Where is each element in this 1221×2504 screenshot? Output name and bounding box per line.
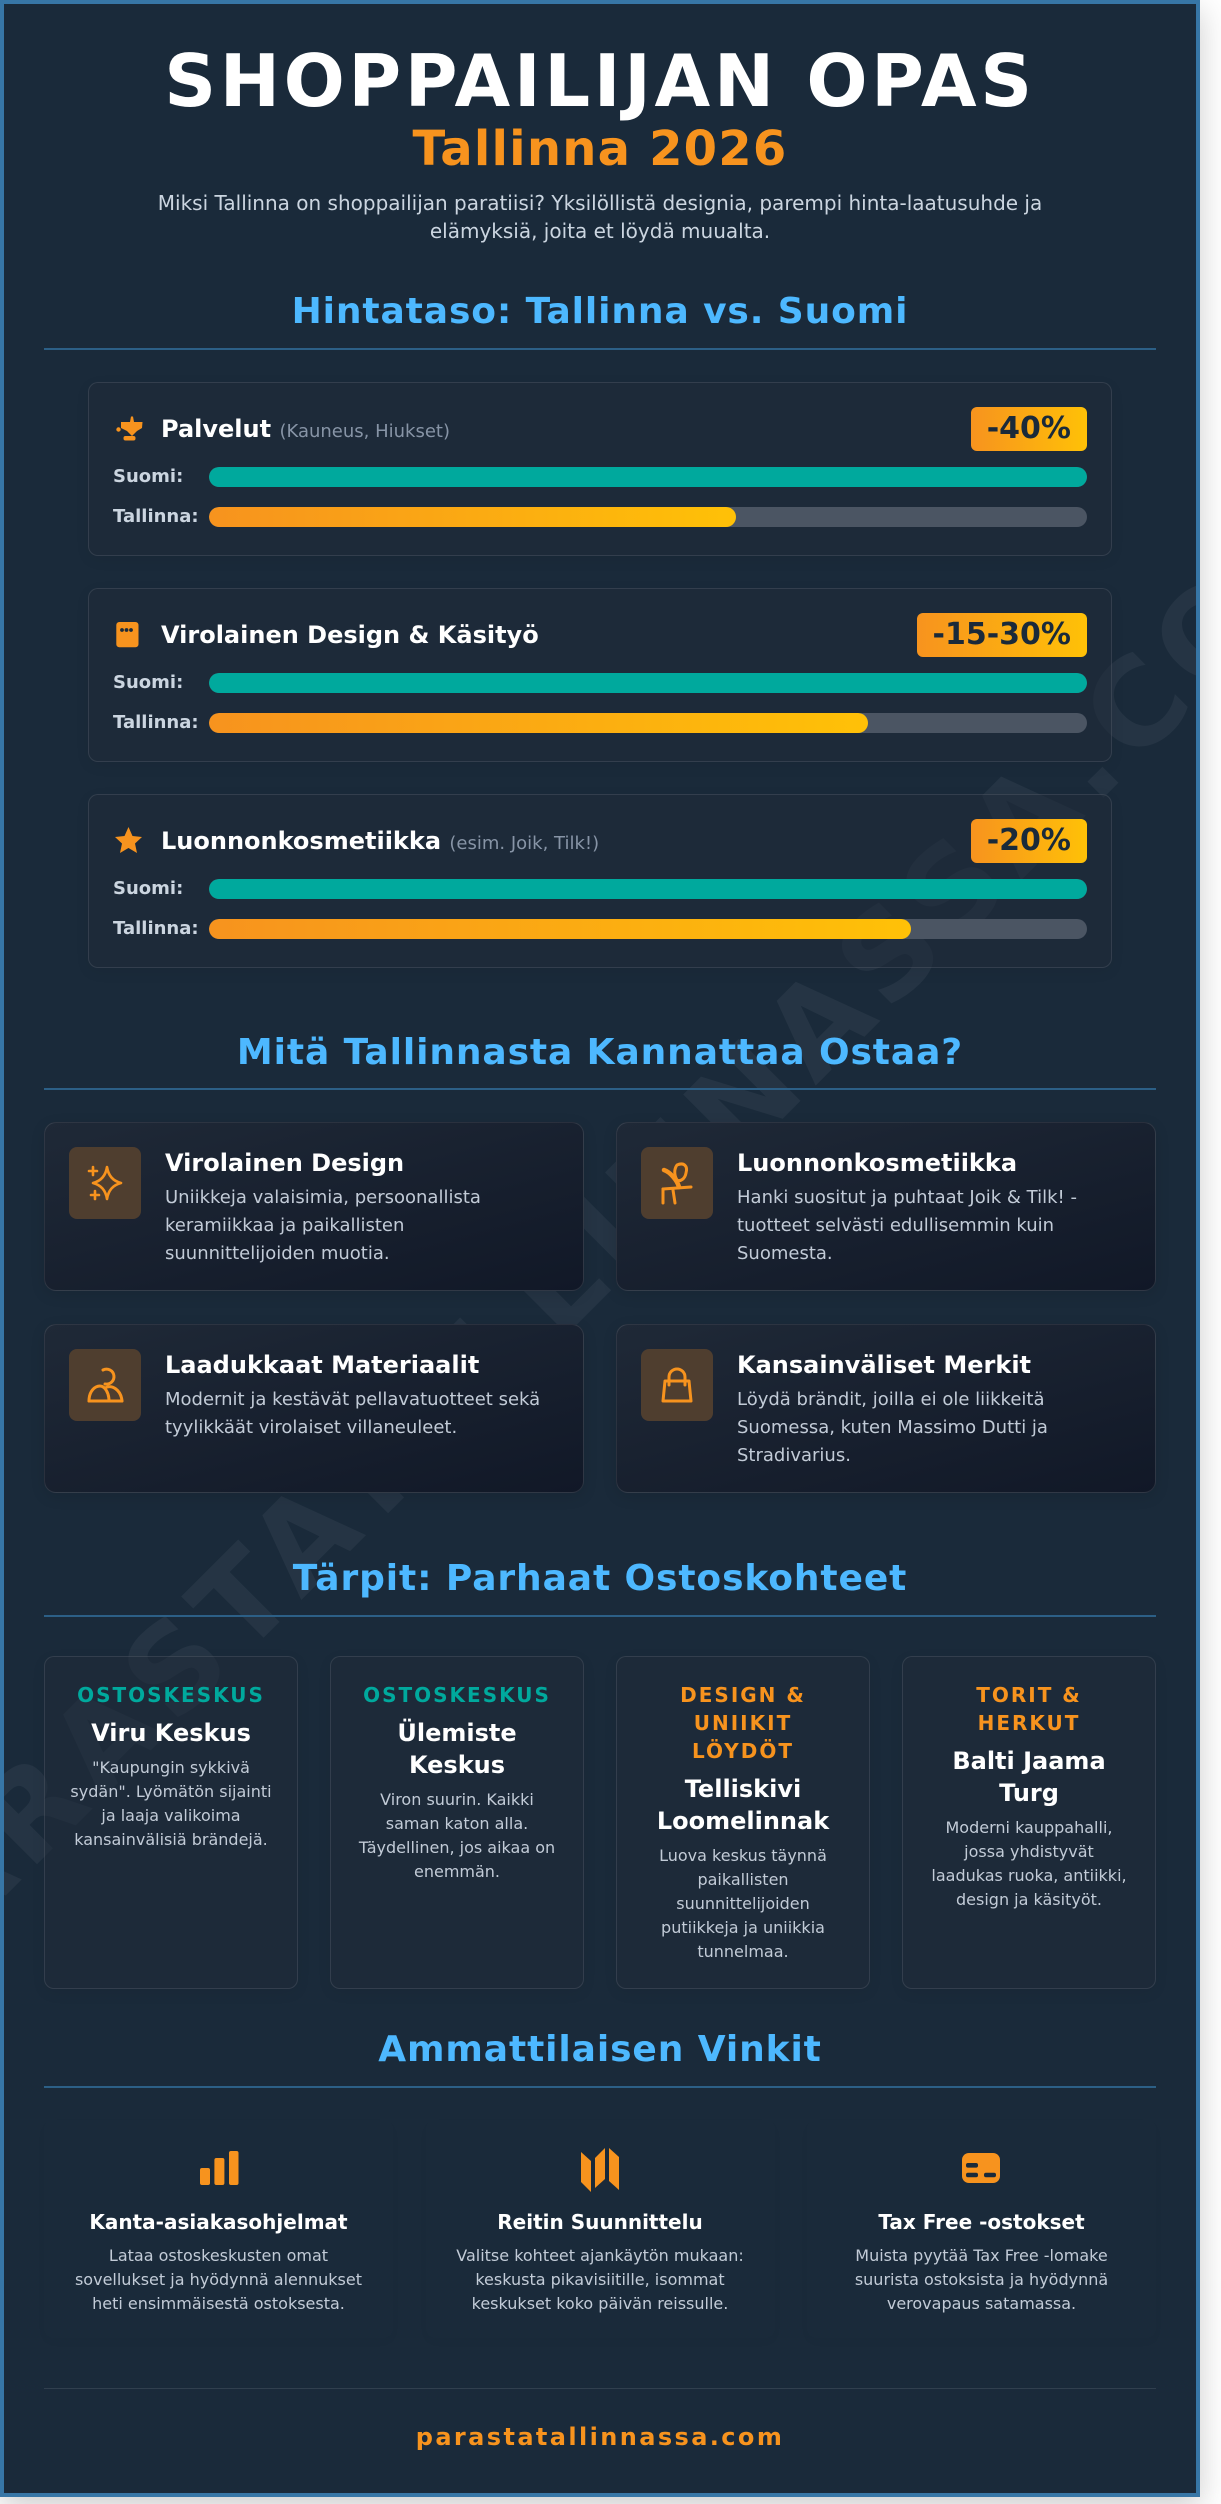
services bar Suomi (209, 467, 1087, 487)
feature design text (165, 1187, 481, 1264)
cosmetics label Tallinna: Tallinna: (113, 918, 199, 939)
heading: top destinations: Tärpit: Parhaat Ostoskohteet (293, 1558, 907, 1599)
cosmetics label Suomi: Suomi: (113, 878, 183, 899)
icon: star (115, 827, 142, 853)
cosmetics bar Tallinna (209, 919, 1087, 939)
panel: Telliskivi Loomelinnak: Luova keskus täynnä (659, 1846, 827, 1865)
services heading: Palvelut (Kauneus, Hiukset) (161, 415, 450, 443)
panel: route tip: keskukset koko päivän reissulle. (472, 2294, 728, 2312)
icon: leaf (662, 1162, 692, 1204)
design bar Suomi (209, 673, 1087, 693)
icon box: bag (641, 1349, 713, 1421)
panel: Viru Keskus: ja laaja valikoima (101, 1806, 241, 1825)
feature cosmetics text (737, 1187, 1077, 1264)
feature brands text (737, 1389, 1048, 1466)
tip title route: Reitin Suunnittelu (497, 2210, 703, 2234)
panel: Telliskivi Loomelinnak: UNIIKIT (694, 1711, 792, 1735)
services label Tallinna: Tallinna: (113, 506, 199, 527)
panel: tax free tip: Muista pyytää Tax Free -lomake (855, 2246, 1108, 2264)
panel: Viru Keskus: kansainvälisiä brändejä. (74, 1830, 268, 1849)
icon box: leaf (641, 1147, 713, 1219)
subtitle: Tallinna 2026 (413, 121, 787, 177)
panel: feature materials (44, 1324, 584, 1493)
design badge (917, 613, 1087, 657)
panel: Balti Jaama Turg: Turg (999, 1778, 1059, 1806)
feature cosmetics text: Suomesta. (737, 1243, 833, 1264)
services badge: -40% (987, 411, 1071, 446)
design label Tallinna: Tallinna: (113, 712, 199, 733)
panel: Telliskivi Loomelinnak: Telliskivi (685, 1774, 801, 1802)
panel: Telliskivi Loomelinnak: suunnittelijoiden (676, 1894, 810, 1913)
services badge (971, 407, 1087, 451)
panel: Viru Keskus: Viru Keskus (91, 1718, 251, 1746)
panel: Balti Jaama Turg: Balti Jaama (952, 1746, 1106, 1774)
panel: route tip: keskusta pikavisiitille, isommat (475, 2270, 725, 2288)
feature materials title: Laadukkaat Materiaalit (165, 1351, 479, 1379)
panel: Telliskivi Loomelinnak: putiikkeja ja uniikkia (661, 1918, 825, 1937)
feature brands text: Stradivarius. (737, 1445, 851, 1466)
panel: feature brands (616, 1324, 1156, 1493)
design bar Tallinna (209, 713, 1087, 733)
panel: tax free tip: verovapaus satamassa. (887, 2294, 1076, 2312)
icon: hanger (88, 1368, 124, 1402)
panel: loyalty tip: Lataa ostoskeskusten omat (109, 2246, 328, 2264)
panel: services price card (88, 382, 1112, 556)
panel: Viru Keskus: sydän". Lyömätön sijainti (70, 1782, 272, 1801)
panel: tax free tip: suurista ostoksista ja hyödynnä (855, 2270, 1108, 2288)
tip title tax free: Tax Free -ostokset (878, 2210, 1085, 2234)
services label Suomi: Suomi: (113, 466, 183, 487)
icon: sparkles (88, 1166, 122, 1200)
panel: Telliskivi Loomelinnak: Loomelinnak (657, 1806, 829, 1834)
panel: Viru Keskus (44, 1656, 298, 1989)
cosmetics badge (971, 819, 1087, 863)
cosmetics heading: Luonnonkosmetiikka (esim. Joik, Tilk!) (161, 827, 599, 855)
icon box: hanger (69, 1349, 141, 1421)
feature cosmetics text: tuotteet selvästi edullisemmin kuin (737, 1215, 1054, 1236)
panel: feature cosmetics (616, 1122, 1156, 1291)
panel: Viru Keskus: OSTOSKESKUS (77, 1683, 265, 1707)
services bar Tallinna (209, 507, 1087, 527)
heading: price level: Hintataso: Tallinna vs. Suomi (292, 291, 908, 332)
feature brands text: Löydä brändit, joilla ei ole liikkeitä (737, 1389, 1044, 1410)
panel: cosmetics price card (88, 794, 1112, 968)
panel: design price card (88, 588, 1112, 762)
tip title loyalty: Kanta-asiakasohjelmat (89, 2210, 348, 2234)
feature brands text: Suomessa, kuten Massimo Dutti ja (737, 1417, 1048, 1438)
heading: pro tips: Ammattilaisen Vinkit (378, 2029, 822, 2070)
panel: Ülemiste Keskus: saman katon alla. (386, 1814, 528, 1833)
panel: feature design (44, 1122, 584, 1291)
design badge: -15-30% (933, 617, 1071, 652)
feature brands title: Kansainväliset Merkit (737, 1351, 1031, 1379)
panel: Balti Jaama Turg: design ja käsityöt. (956, 1890, 1102, 1909)
panel: route tip: Valitse kohteet ajankäytön mukaan: (456, 2246, 744, 2264)
panel: Balti Jaama Turg: HERKUT (978, 1711, 1080, 1735)
panel: Ülemiste Keskus (330, 1656, 584, 1989)
panel: Ülemiste Keskus: Täydellinen, jos aikaa on (359, 1838, 555, 1857)
heading: what to buy: Mitä Tallinnasta Kannattaa Ostaa? (237, 1032, 963, 1073)
panel: Ülemiste Keskus: Viron suurin. Kaikki (380, 1790, 534, 1809)
panel: Balti Jaama Turg (902, 1656, 1156, 1989)
icon: design (116, 622, 138, 648)
panel: Telliskivi Loomelinnak: LÖYDÖT (692, 1739, 794, 1763)
title: SHOPPAILIJAN OPAS (164, 39, 1036, 123)
panel: Telliskivi Loomelinnak: paikallisten (697, 1870, 789, 1889)
feature materials text: Modernit ja kestävät pellavatuotteet sekä (165, 1389, 540, 1410)
design label Suomi: Suomi: (113, 672, 183, 693)
feature materials text (165, 1389, 540, 1438)
panel: route tip (426, 2120, 774, 2338)
feature design text: suunnittelijoiden muotia. (165, 1243, 390, 1264)
intro text (158, 190, 1042, 243)
panel: loyalty tip (44, 2120, 393, 2338)
feature materials text: tyylikkäät virolaiset villaneuleet. (165, 1417, 457, 1438)
panel: Ülemiste Keskus: OSTOSKESKUS (363, 1683, 551, 1707)
icon box: sparkles (69, 1147, 141, 1219)
intro text: elämyksiä, joita et löydä muualta. (430, 219, 770, 243)
cosmetics badge: -20% (987, 823, 1071, 858)
footer divider (44, 2388, 1156, 2389)
panel: Balti Jaama Turg: TORIT & (976, 1683, 1082, 1707)
panel: Ülemiste Keskus: Ülemiste (397, 1718, 517, 1746)
panel: Ülemiste Keskus: enemmän. (414, 1862, 500, 1881)
panel: Balti Jaama Turg: Moderni kauppahalli, (946, 1818, 1112, 1837)
panel: loyalty tip: sovellukset ja hyödynnä alennukset (75, 2270, 362, 2288)
footer link: parastatallinnassa.com (416, 2423, 784, 2451)
panel: Viru Keskus: "Kaupungin sykkivä (92, 1758, 250, 1777)
icon: bag (662, 1368, 692, 1402)
icon: services (116, 416, 142, 440)
panel: tax free tip (807, 2120, 1156, 2338)
feature design text: Uniikkeja valaisimia, persoonallista (165, 1187, 481, 1208)
feature cosmetics text: Hanki suositut ja puhtaat Joik & Tilk! - (737, 1187, 1077, 1208)
panel: loyalty tip: heti ensimmäisestä ostoksesta. (92, 2294, 345, 2312)
cosmetics bar Suomi (209, 879, 1087, 899)
feature cosmetics title: Luonnonkosmetiikka (737, 1149, 1017, 1177)
panel: Balti Jaama Turg: laadukas ruoka, antiikki, (931, 1866, 1127, 1885)
feature design title: Virolainen Design (165, 1149, 404, 1177)
panel: Telliskivi Loomelinnak: tunnelmaa. (697, 1942, 789, 1961)
design heading: Virolainen Design & Käsityö (161, 621, 539, 649)
panel: Telliskivi Loomelinnak: DESIGN & (680, 1683, 806, 1707)
feature design text: keramiikkaa ja paikallisten (165, 1215, 404, 1236)
intro text: Miksi Tallinna on shoppailijan paratiisi? Yksilöllistä designia, parempi hinta-laatusuhde ja (158, 190, 1042, 214)
panel: Balti Jaama Turg: jossa yhdistyvät (964, 1842, 1094, 1861)
panel: Ülemiste Keskus: Keskus (409, 1750, 505, 1778)
panel: Telliskivi Loomelinnak (616, 1656, 870, 1989)
